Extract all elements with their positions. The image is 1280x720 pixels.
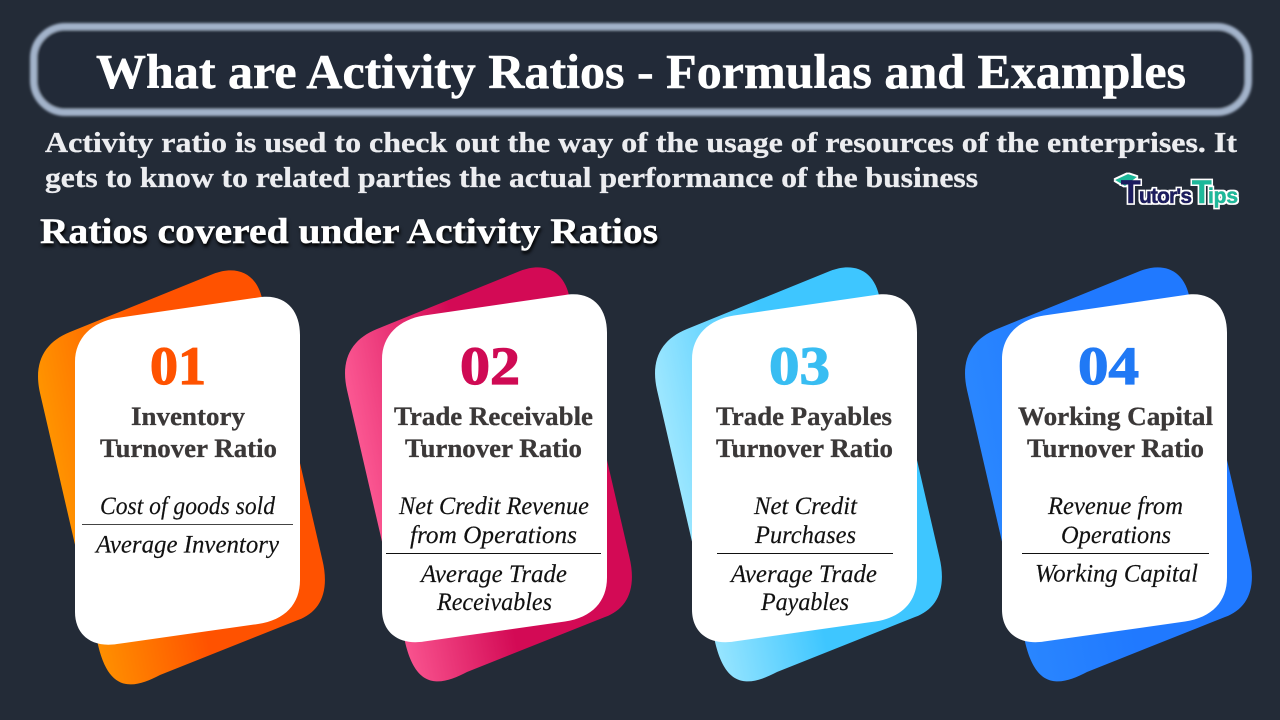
ratio name: Trade Payables (716, 402, 892, 431)
formula: from Operations (410, 522, 577, 549)
ratio name (716, 402, 893, 463)
panel: card 04 (965, 267, 1252, 681)
ratio name (1018, 402, 1213, 463)
formula: Purchases (754, 522, 856, 549)
ratio name (100, 402, 277, 463)
intro text block (45, 127, 1237, 194)
banner glowing frame (34, 26, 1248, 112)
number: 03 (769, 336, 830, 396)
formula: Average Trade (729, 561, 877, 588)
ratio name: Turnover Ratio (100, 434, 277, 463)
logo: Tutor's Tips (1115, 174, 1238, 210)
ratio name: Turnover Ratio (716, 434, 893, 463)
formula: Receivables (436, 589, 552, 616)
white card (382, 294, 607, 642)
white card (692, 294, 917, 642)
ratio name: Turnover Ratio (1027, 434, 1204, 463)
panel: card 01 (38, 270, 325, 684)
formula: Average Trade (419, 561, 567, 588)
formula (386, 493, 601, 616)
formula: Payables (760, 589, 849, 616)
ratio name: Trade Receivable (394, 402, 593, 431)
formula: Average Inventory (94, 532, 280, 558)
back shape (965, 267, 1252, 681)
formula: Cost of goods sold (100, 493, 275, 520)
white card (75, 297, 300, 645)
formula (717, 493, 893, 616)
back shape (345, 267, 632, 681)
logo wordmark: T (1192, 174, 1212, 210)
number: 02 (460, 336, 520, 396)
ratio name: Inventory (131, 402, 245, 431)
intro text block: Activity ratio is used to check out the way of the usage of resources of the enterprises. It (45, 127, 1237, 159)
formula (1022, 493, 1209, 588)
formula: Working Capital (1035, 560, 1198, 588)
number: 04 (1078, 336, 1139, 396)
formula: Revenue from (1047, 493, 1183, 520)
formula: Net Credit Revenue (398, 493, 589, 520)
white card (1002, 294, 1227, 642)
ratio name: Working Capital (1018, 402, 1213, 431)
back shape (655, 267, 942, 681)
intro text block: gets to know to related parties the actual performance of the business (45, 162, 978, 194)
icon: graduation cap (1115, 174, 1137, 186)
back shape (38, 270, 325, 684)
logo wordmark: T (1121, 174, 1141, 210)
title banner (34, 26, 1248, 112)
formula (82, 493, 293, 558)
title: What are Activity Ratios - Formulas and Examples (96, 44, 1186, 99)
number: 01 (150, 336, 206, 396)
formula: Operations (1061, 522, 1171, 549)
section heading: Ratios covered under Activity Ratios (40, 211, 658, 251)
panel: card 03 (655, 267, 942, 681)
formula: Net Credit (753, 493, 858, 520)
panel: card 02 (345, 267, 632, 681)
ratio name (394, 402, 593, 463)
logo wordmark: ips (1208, 185, 1238, 208)
logo wordmark: utor's (1139, 185, 1192, 208)
ratio name: Turnover Ratio (405, 434, 582, 463)
